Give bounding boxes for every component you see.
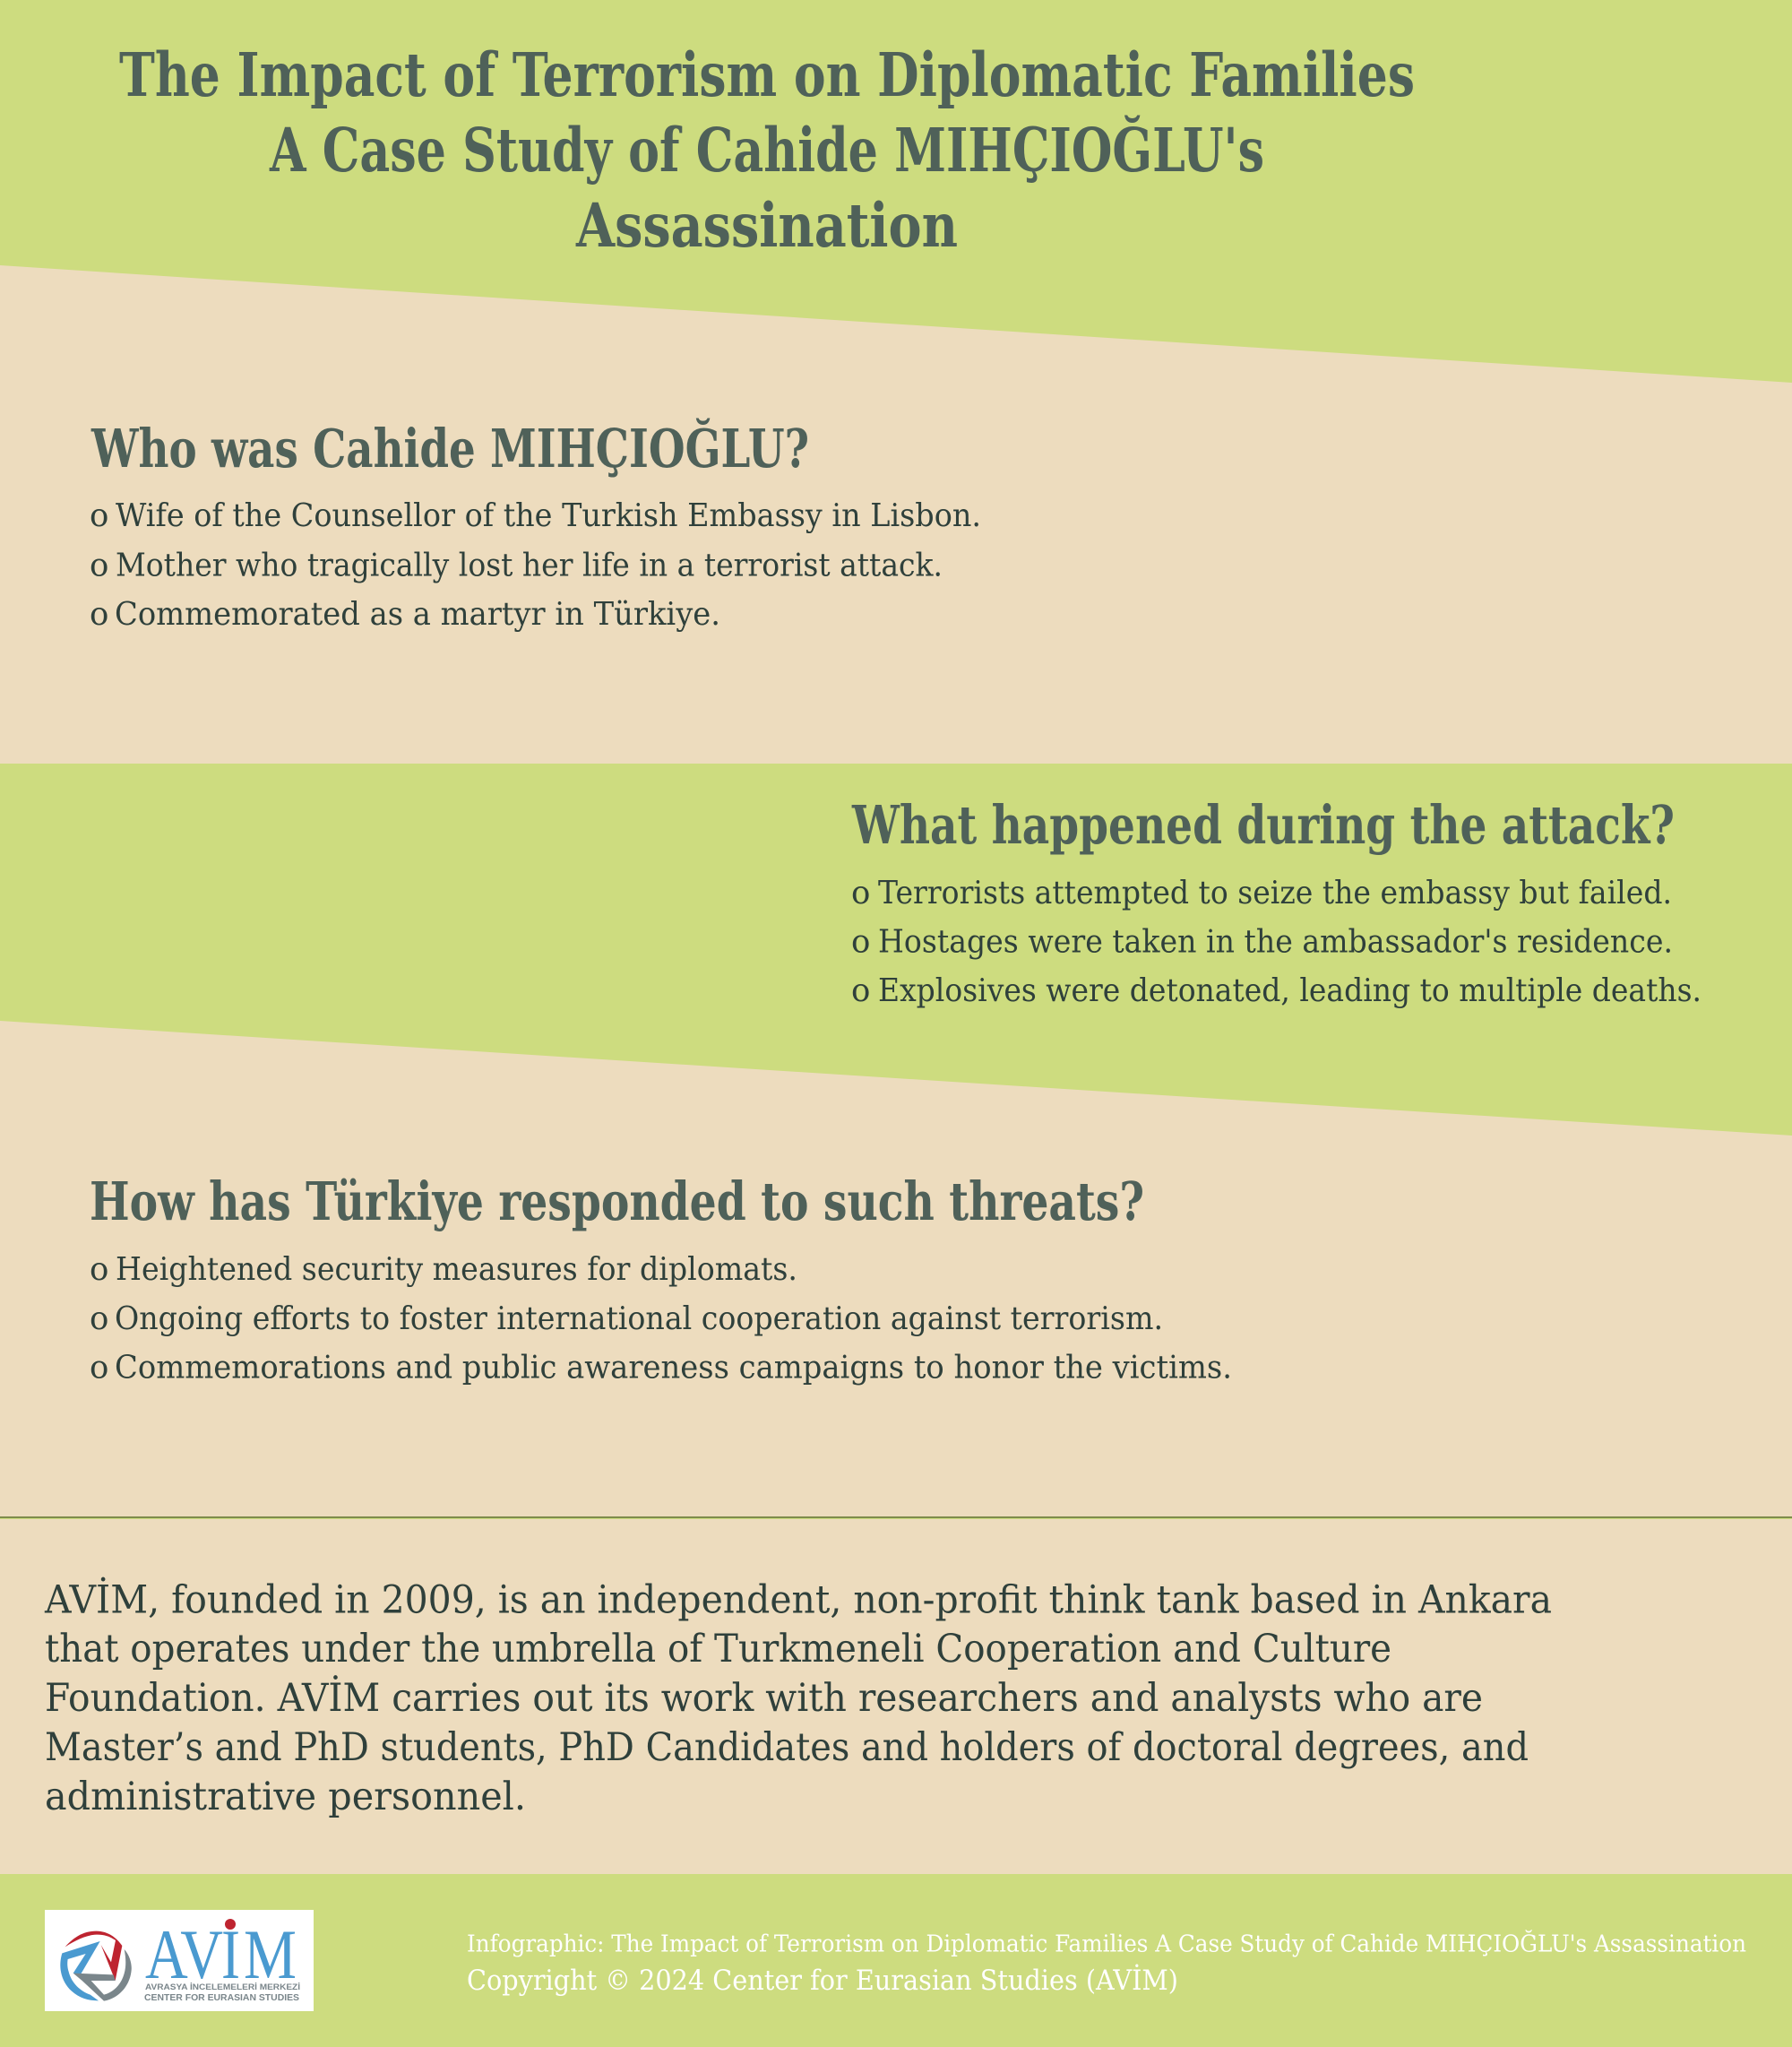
list: what happened: Explosives were detonated, leading to multiple deaths. (878, 972, 1702, 1009)
wordmark: I (221, 1915, 240, 1993)
footer credit (467, 1929, 1746, 1997)
list: what happened: Hostages were taken in the ambassador's residence. (878, 923, 1673, 961)
list: Türkiye response: o (90, 1251, 108, 1288)
wordmark: M (244, 1915, 297, 1993)
header band (0, 0, 1792, 383)
middle band (0, 764, 1792, 1136)
panel: who was Cahide (90, 418, 981, 633)
list: Türkiye response: Commemorations and public awareness campaigns to honor the victims. (115, 1350, 1232, 1386)
list: who was Cahide: o (90, 547, 108, 584)
list: who was Cahide (90, 497, 981, 633)
list: what happened: Terrorists attempted to seize the embassy but failed. (878, 875, 1672, 911)
panel: Türkiye response (90, 1170, 1232, 1386)
list: what happened (851, 875, 1702, 1009)
list: Türkiye response: o (90, 1350, 108, 1386)
footer credit: Copyright © 2024 Center for Eurasian Studies (AVİM) (467, 1963, 1178, 1997)
text block: about AVİM (44, 1577, 1552, 1819)
text block: about AVİM: Foundation. AVİM carries out its work with researchers and analysts who are (45, 1675, 1483, 1721)
panel: what happened (851, 794, 1702, 1009)
heading: Türkiye response: How has Türkiye responded to such threats? (90, 1170, 1144, 1232)
footer band (0, 1874, 1792, 2047)
text block: about AVİM: Master’s and PhD students, PhD Candidates and holders of doctoral degrees, and (45, 1725, 1529, 1770)
title: A Case Study of Cahide MIHÇIOĞLU's (269, 115, 1264, 186)
list: Türkiye response: o (90, 1300, 108, 1337)
list: Türkiye response (90, 1251, 1232, 1386)
footer credit: Infographic: The Impact of Terrorism on Diplomatic Families A Case Study of Cahide MIHÇIOĞLU's Assassination (467, 1929, 1746, 1957)
title: Assassination (575, 190, 958, 261)
list: Türkiye response: Heightened security measures for diplomats. (116, 1251, 797, 1288)
logo caption: AVRASYA İNCELEMELERİ MERKEZİ (145, 1982, 300, 1992)
list: who was Cahide: o (90, 497, 108, 534)
list: who was Cahide: Wife of the Counsellor of the Turkish Embassy in Lisbon. (116, 497, 981, 534)
title: The Impact of Terrorism on Diplomatic Families (119, 39, 1415, 110)
text block: about AVİM: that operates under the umbrella of Turkmeneli Cooperation and Culture (45, 1627, 1391, 1671)
icon: AVİM emblem (60, 1931, 132, 2001)
text block: about AVİM: AVİM, founded in 2009, is an independent, non-profit think tank based in Ankara (44, 1577, 1552, 1622)
list: who was Cahide: Mother who tragically lost her life in a terrorist attack. (116, 547, 943, 584)
logo (45, 1910, 314, 2011)
text block: about AVİM: administrative personnel. (45, 1775, 526, 1819)
list: what happened: o (851, 875, 870, 911)
wordmark: AV (145, 1915, 223, 1993)
wordmark (145, 1915, 297, 1993)
list: Türkiye response: Ongoing efforts to foster international cooperation against terrorism. (115, 1300, 1163, 1337)
heading: who was Cahide: Who was Cahide MIHÇIOĞLU? (90, 418, 809, 479)
list: what happened: o (851, 972, 870, 1009)
list: what happened: o (851, 923, 870, 961)
logo caption (144, 1982, 300, 2003)
list: who was Cahide: o (90, 596, 108, 633)
title (119, 39, 1415, 261)
logo caption: CENTER FOR EURASIAN STUDIES (144, 1993, 299, 2003)
list: who was Cahide: Commemorated as a martyr in Türkiye. (115, 596, 720, 633)
